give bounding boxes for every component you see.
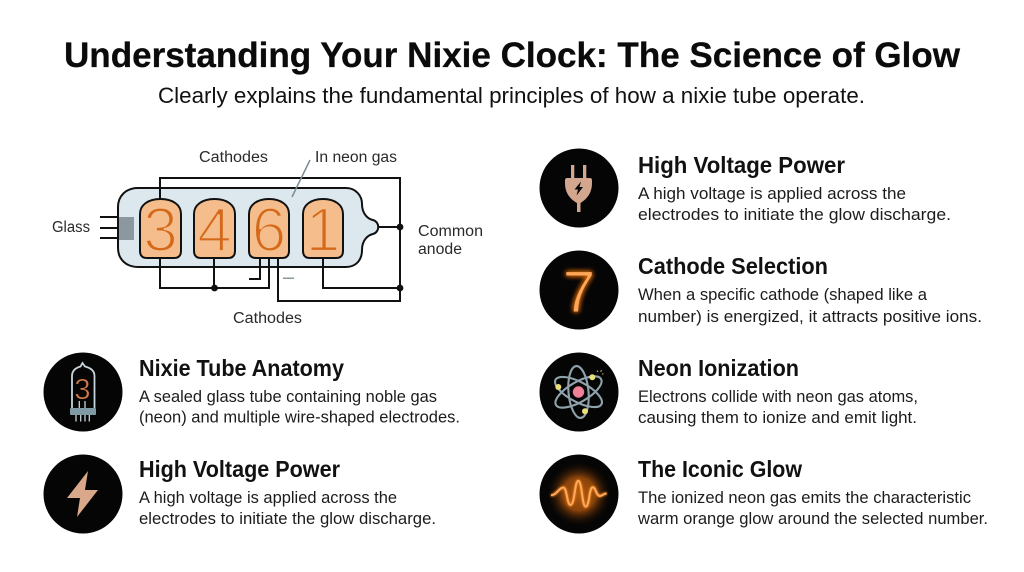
- panel: cathode selection: [540, 250, 982, 330]
- panel: high voltage power right: [540, 148, 951, 228]
- heading: The Iconic Glow: [638, 456, 802, 482]
- panel: high voltage power left: [44, 454, 436, 534]
- leader line: [292, 160, 310, 197]
- cathode 1: 1: [306, 196, 340, 265]
- description: [638, 286, 982, 326]
- heading: Nixie Tube Anatomy: [139, 355, 344, 381]
- description: Electrons collide with neon gas atoms,: [638, 388, 918, 406]
- description: warm orange glow around the selected number.: [637, 510, 988, 528]
- subtitle: Clearly explains the fundamental principles of how a nixie tube operate.: [158, 83, 865, 108]
- icon: nixie tube: 3: [74, 374, 91, 406]
- icon: nixie tube: [44, 352, 122, 432]
- cathode 4: 4: [197, 196, 232, 265]
- description: number) is energized, it attracts positive ions.: [638, 308, 982, 326]
- label: common anode: anode: [418, 241, 462, 258]
- description: When a specific cathode (shaped like a: [638, 286, 928, 304]
- wire junction dots: [211, 224, 403, 291]
- label: cathodes bottom: Cathodes: [233, 310, 302, 327]
- small grey dash: [283, 278, 294, 279]
- cathode 6: 6: [252, 196, 286, 265]
- panel: the iconic glow: [540, 454, 988, 534]
- icon: glowing seven: 7: [563, 260, 595, 325]
- label: in neon gas: In neon gas: [315, 149, 397, 166]
- description: [139, 388, 460, 426]
- panel: neon ionization: [540, 352, 918, 432]
- glass base pins: [100, 217, 119, 238]
- description: (neon) and multiple wire-shaped electrodes.: [139, 408, 460, 426]
- description: [139, 489, 436, 528]
- description: [637, 489, 988, 528]
- heading: High Voltage Power: [638, 152, 845, 178]
- wiring: [160, 178, 400, 301]
- cathode 3: 3: [143, 196, 178, 265]
- description: electrodes to initiate the glow discharge.: [638, 206, 951, 224]
- label: common anode: Common: [418, 223, 483, 240]
- description: A sealed glass tube containing noble gas: [139, 388, 437, 406]
- icon: glowing wave: [540, 454, 618, 534]
- description: causing them to ionize and emit light.: [638, 409, 917, 427]
- icon: atom: [540, 352, 618, 432]
- description: The ionized neon gas emits the characteristic: [638, 489, 971, 507]
- description: electrodes to initiate the glow discharge.: [139, 510, 436, 528]
- label: cathodes top: Cathodes: [199, 149, 268, 166]
- description: [638, 185, 951, 224]
- heading: High Voltage Power: [139, 456, 340, 482]
- diagram: nixie tube schematic: [52, 149, 483, 327]
- label: glass: Glass: [52, 219, 90, 236]
- label: common anode: [418, 223, 483, 258]
- icon: plug: [540, 148, 618, 228]
- grey base block: [119, 217, 134, 240]
- description: A high voltage is applied across the: [139, 489, 397, 507]
- icon: lightning bolt: [44, 454, 122, 534]
- description: A high voltage is applied across the: [638, 185, 906, 203]
- heading: Cathode Selection: [638, 253, 828, 279]
- icon: glowing seven: [540, 250, 618, 330]
- title: Understanding Your Nixie Clock: The Science of Glow: [64, 35, 960, 75]
- description: [638, 388, 918, 427]
- panel: nixie tube anatomy: [44, 352, 460, 432]
- heading: Neon Ionization: [638, 355, 799, 381]
- glass tube body: [118, 188, 378, 267]
